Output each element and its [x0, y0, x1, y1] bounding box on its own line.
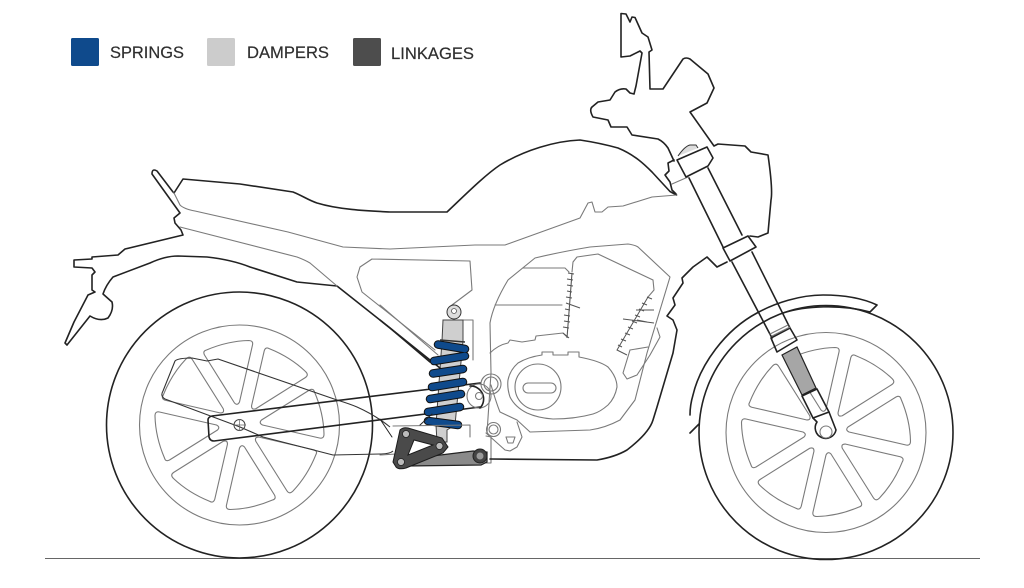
fork collar [723, 236, 756, 261]
engine [481, 244, 670, 463]
seat and tank outline [174, 140, 676, 212]
legend: linkages [353, 38, 474, 66]
frame tubes to shock [357, 259, 472, 350]
exhaust bracket [623, 328, 660, 379]
damper: shock body [436, 320, 463, 442]
swingarm pivot [467, 384, 491, 408]
linkages [393, 428, 487, 469]
fork boot [771, 328, 797, 352]
chain guard [162, 358, 393, 455]
fork top cap [678, 145, 698, 156]
handlebar and headlight [591, 14, 772, 237]
front fender [690, 295, 877, 433]
ground line [45, 558, 980, 560]
shock bracket [462, 320, 473, 360]
frame lines [490, 268, 569, 353]
cooling fins: left [563, 273, 580, 338]
rear frame tube [174, 193, 677, 286]
engine mount bolts [481, 374, 522, 463]
spring seat [440, 340, 465, 342]
springs: rear coil [428, 344, 465, 425]
front wheel [699, 306, 953, 560]
grab rail and rear subframe [65, 170, 430, 362]
upper fork tube [689, 168, 742, 247]
damper: front fork [782, 347, 816, 395]
fork slider and axle [802, 389, 836, 438]
legend: dampers [207, 38, 329, 66]
link rod [408, 449, 487, 466]
legend: dampers: DAMPERS [247, 43, 329, 62]
swingarm [208, 383, 480, 441]
legend [71, 38, 474, 66]
legend: linkages: LINKAGES [391, 44, 474, 63]
fork assembly [677, 145, 836, 438]
triangular rocker [393, 428, 448, 469]
swingarm to linkage lines [380, 425, 470, 455]
crankcase outline [487, 244, 670, 433]
shock top mount [447, 305, 461, 319]
lower fork tube [732, 252, 790, 338]
legend: springs [71, 38, 184, 66]
engine side cover [508, 352, 617, 419]
cooling fins: right [617, 297, 654, 355]
rear axle [233, 419, 246, 431]
cylinder head [572, 254, 654, 297]
legend: springs: SPRINGS [110, 43, 184, 62]
frame tube in front of shock [380, 320, 440, 368]
lower frame line [490, 257, 727, 460]
fork clamp [677, 147, 713, 177]
rear shock absorber [208, 305, 491, 442]
rear wheel [106, 292, 372, 558]
